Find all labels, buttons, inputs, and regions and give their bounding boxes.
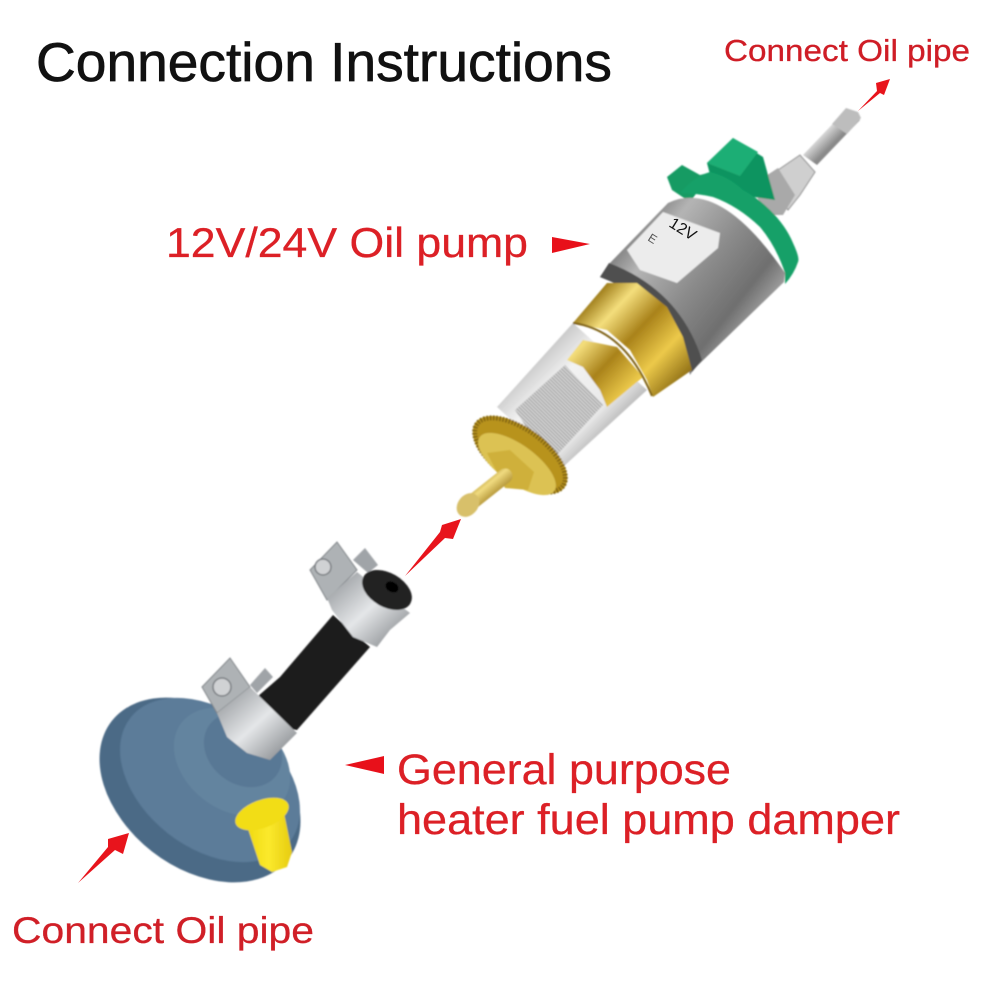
damper step	[153, 686, 311, 838]
hose bore	[383, 579, 401, 595]
dark band	[600, 263, 702, 372]
knurled cap	[460, 401, 580, 509]
oil pump	[452, 108, 861, 521]
arrow: to top pipe	[858, 79, 890, 111]
green ear	[667, 165, 712, 202]
green tab	[707, 138, 775, 200]
title: Connection Instructions	[36, 31, 612, 93]
paper label	[627, 212, 720, 283]
arrow: nipple connection	[405, 519, 461, 576]
label: E on pump: E	[645, 231, 660, 247]
inner brass core	[567, 340, 643, 407]
brass collar	[573, 283, 692, 397]
lower clamp band	[217, 687, 297, 760]
arrow: to damper inlet	[78, 833, 129, 883]
collar edge line	[573, 323, 652, 396]
pump metal body	[600, 198, 785, 375]
damper disc rim	[64, 660, 336, 920]
upper clamp band	[327, 572, 410, 647]
label: 12V on pump: 12V	[666, 215, 699, 245]
lower clamp ears	[202, 658, 273, 713]
filter mesh	[515, 365, 603, 455]
label: connect oil pipe top: Connect Oil pipe	[724, 33, 970, 68]
damper disc face	[89, 664, 331, 896]
glass tube	[497, 323, 647, 467]
green tab top face	[707, 138, 758, 176]
arrow: damper	[345, 756, 384, 774]
damper dome	[189, 697, 297, 803]
upper clamp ears	[310, 542, 378, 600]
hose	[257, 615, 370, 730]
outlet fitting	[752, 108, 861, 215]
label: 12V/24V oil pump: 12V/24V Oil pump	[166, 219, 528, 266]
damper line 2: heater fuel pump damper	[397, 796, 900, 844]
brass hex base	[487, 450, 534, 490]
inlet nipple	[471, 476, 505, 503]
label: damper	[397, 746, 900, 844]
arrow: oil pump	[552, 237, 590, 253]
label: connect oil pipe bottom: Connect Oil pipe	[12, 910, 314, 951]
hose end	[355, 562, 419, 618]
green ring	[680, 172, 798, 284]
damper line 1: General purpose	[397, 746, 731, 794]
yellow cap	[231, 791, 293, 872]
damper assembly	[64, 542, 419, 920]
nipple barb	[452, 489, 484, 521]
